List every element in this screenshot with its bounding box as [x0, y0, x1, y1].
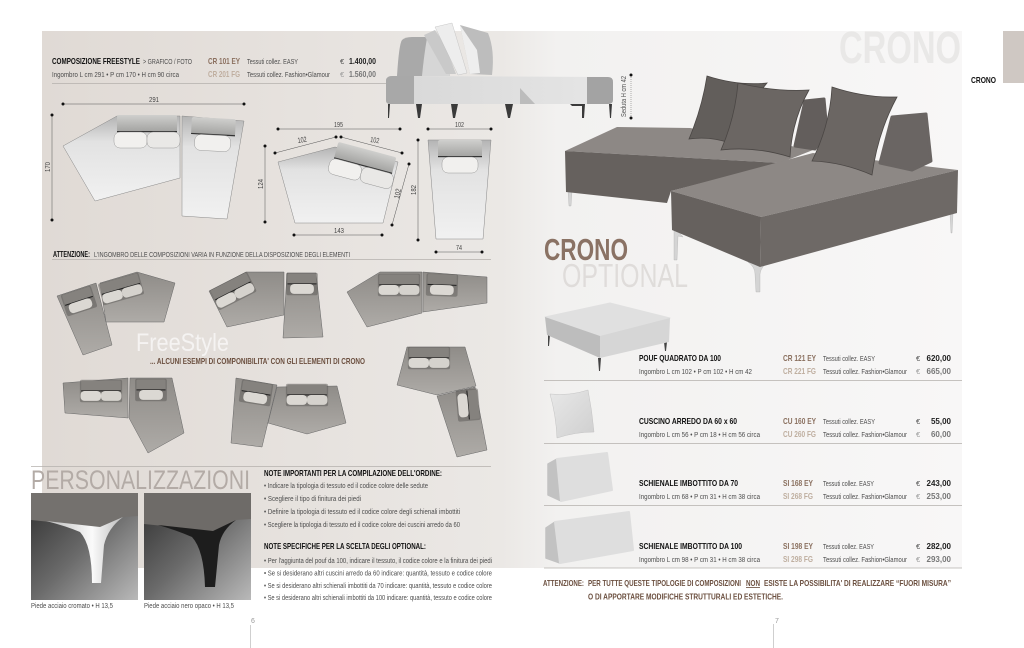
product row: backrest 100: Tessuti collez. EASY — [823, 542, 874, 551]
backrest 70 image — [548, 453, 612, 501]
plan: sofa element — [278, 141, 399, 223]
dimension: seat height: Seduta H cm 42 — [619, 76, 628, 117]
composition header: € — [340, 70, 345, 79]
example layout 1 — [57, 272, 175, 355]
page number 7: 7 — [775, 618, 779, 625]
crono optional heading: OPTIONAL — [562, 257, 688, 294]
optional notes: • Se si desiderano altri schienali imbottiti da 70 indicare: quantità, tessuto e codice colore — [264, 581, 492, 590]
product row: backrest 70: Tessuti collez. EASY — [823, 479, 874, 488]
page number 6 — [250, 618, 255, 648]
product row: pouf: 620,00 — [927, 354, 952, 363]
example layout 2 — [209, 271, 323, 338]
dimension: seat height — [619, 74, 632, 120]
left backrest — [795, 99, 827, 149]
order notes: • Scegliere il tipo di finitura dei piedi — [264, 494, 361, 503]
dimensions: chaise element: 74 — [456, 243, 462, 252]
attention footer: O DI APPORTARE MODIFICHE STRUTTURALI ED ESTETICHE. — [588, 592, 783, 602]
right cushion — [812, 87, 897, 175]
product row: backrest 70: € — [916, 492, 921, 501]
dimensions: freestyle composition: 291 — [149, 95, 159, 104]
product row: backrest 70: Ingombro L cm 68 • P cm 31 • H cm 38 circa — [639, 492, 761, 501]
product row: cushion: 55,00 — [931, 417, 952, 426]
attention note: ATTENZIONE: — [53, 250, 90, 259]
product row: cushion: Tessuti collez. Fashion•Glamour — [823, 430, 907, 439]
dimensions: sofa element — [256, 120, 410, 236]
product row: pouf: € — [916, 367, 921, 376]
attention footer: NON — [746, 579, 760, 588]
dimensions: sofa element: 124 — [256, 179, 265, 189]
product row: backrest 100: 293,00 — [927, 555, 952, 564]
product row: pouf — [544, 303, 962, 380]
dimensions: sofa element: 195 — [334, 120, 343, 129]
back cushion — [689, 76, 767, 143]
front seat left face — [671, 191, 761, 267]
optional notes: • Se si desiderano altri schienali imbottiti da 100 indicare: quantità, tessuto e codice colore — [264, 593, 492, 602]
product row: backrest 100: SI 298 FG — [783, 555, 813, 564]
product row: pouf: Ingombro L cm 102 • P cm 102 • H cm 42 — [639, 367, 752, 376]
product row: cushion: € — [916, 430, 921, 439]
dimensions: sofa element: 102 — [297, 135, 307, 145]
middle cushion — [721, 83, 809, 157]
optional notes — [264, 542, 492, 602]
dimensions: chaise element — [409, 120, 492, 254]
dimensions: chaise element: 182 — [409, 185, 418, 195]
product row: cushion: CU 260 FG — [783, 430, 816, 439]
left seat top — [565, 127, 813, 163]
example layout 3 — [347, 272, 487, 327]
photo: chrome foot — [31, 493, 138, 610]
composition header: COMPOSIZIONE FREESTYLE — [52, 57, 140, 66]
front seat top — [671, 153, 958, 217]
cushion image — [550, 390, 594, 438]
dimensions: freestyle composition — [43, 95, 246, 222]
product row: backrest 70 — [544, 453, 962, 506]
tab: crono: CRONO — [971, 76, 997, 85]
product row: backrest 100: SCHIENALE IMBOTTITO DA 100 — [639, 542, 742, 551]
dimensions: sofa element: 102 — [370, 135, 380, 145]
composition header: € — [340, 57, 345, 66]
product row: backrest 100: € — [916, 555, 921, 564]
order notes — [264, 469, 460, 529]
attention footer: ESISTE LA POSSIBILITA' DI REALIZZARE “FUORI MISURA” — [764, 579, 951, 588]
product row: backrest 100: 282,00 — [927, 542, 952, 551]
attention footer — [543, 579, 951, 602]
page number 7 — [774, 618, 779, 648]
example layout 4 — [63, 378, 184, 453]
photo: black foot: Piede acciaio nero opaco • H 13,5 — [144, 601, 234, 610]
product row: pouf: Tessuti collez. EASY — [823, 354, 875, 363]
composition header: > GRAFICO / FOTO — [143, 57, 192, 66]
side view sofa — [386, 23, 613, 118]
optional notes: NOTE SPECIFICHE PER LA SCELTA DEGLI OPTIONAL: — [264, 542, 426, 551]
backrest 100 image — [546, 512, 633, 563]
product row: backrest 70: 253,00 — [927, 492, 952, 501]
product row: backrest 100: Tessuti collez. Fashion•Glamour — [823, 555, 907, 564]
attention footer: PER TUTTE QUESTE TIPOLOGIE DI COMPOSIZIONI — [588, 579, 741, 588]
sofa legs — [568, 191, 953, 292]
plan: freestyle composition — [63, 115, 244, 219]
product row: cushion — [544, 390, 962, 444]
product row: cushion: Ingombro L cm 56 • P cm 18 • H cm 56 circa — [639, 430, 761, 439]
composition header: 1.560,00 — [349, 70, 376, 79]
product row: cushion: € — [916, 417, 921, 426]
product row: cushion: 60,00 — [931, 430, 952, 439]
product row: backrest 70: 243,00 — [927, 479, 952, 488]
example layout 6 — [397, 347, 487, 457]
order notes: NOTE IMPORTANTI PER LA COMPILAZIONE DELL'ORDINE: — [264, 469, 442, 478]
composition header: Ingombro L cm 291 • P cm 170 • H cm 90 circa — [52, 70, 180, 79]
photo: black foot — [144, 493, 251, 610]
composition header: CR 101 EY — [208, 57, 240, 66]
composition header: Tessuti collez. EASY — [247, 57, 298, 66]
pouf image — [545, 303, 670, 371]
dimensions: sofa element: 143 — [334, 226, 344, 235]
crono optional heading: CRONO — [544, 232, 628, 267]
order notes: • Definire la tipologia di tessuto ed il codice colore degli schienali imbottiti — [264, 507, 460, 516]
example layout 5 — [231, 378, 346, 447]
order notes: • Scegliere la tipologia di tessuto ed il codice colore dei cuscini arredo da 60 — [264, 520, 460, 529]
product row: pouf: 665,00 — [927, 367, 952, 376]
product row: backrest 100: SI 198 EY — [783, 542, 813, 551]
watermark title: CRONO — [839, 22, 961, 73]
photo: chrome foot: Piede acciaio cromato • H 13,5 — [31, 601, 113, 610]
product row: backrest 70: SI 168 EY — [783, 479, 813, 488]
order notes: • Indicare la tipologia di tessuto ed il codice colore delle sedute — [264, 481, 428, 490]
left seat front — [565, 151, 780, 203]
tab: crono — [971, 31, 1024, 85]
product row: pouf: CR 221 FG — [783, 367, 816, 376]
dimensions: chaise element: 102 — [455, 120, 464, 129]
background panel — [42, 31, 962, 568]
composition header — [52, 57, 392, 84]
plan: chaise element — [428, 140, 491, 239]
composition header: Tessuti collez. Fashion•Glamour — [247, 70, 330, 79]
product row: pouf: € — [916, 354, 921, 363]
product row: cushion: Tessuti collez. EASY — [823, 417, 875, 426]
freestyle label: FreeStyle — [136, 329, 229, 357]
dimensions: sofa element: 102 — [392, 188, 403, 199]
product row: backrest 70: Tessuti collez. Fashion•Glamour — [823, 492, 907, 501]
product row: cushion: CU 160 EY — [783, 417, 816, 426]
divider above personalisation — [31, 466, 491, 468]
product row: backrest 100: € — [916, 542, 921, 551]
optional notes: • Per l'aggiunta del pouf da 100, indicare il tessuto, il codice colore e la finitura dei piedi — [264, 556, 492, 565]
product row: cushion: CUSCINO ARREDO DA 60 x 60 — [639, 417, 737, 426]
product row: pouf: Tessuti collez. Fashion•Glamour — [823, 367, 907, 376]
composition header: 1.400,00 — [349, 57, 376, 66]
optional notes: • Se si desiderano altri cuscini arredo da 60 indicare: quantità, tessuto e codice colore — [264, 568, 492, 578]
product row: pouf: POUF QUADRATO DA 100 — [639, 354, 721, 363]
personalizzazioni heading: PERSONALIZZAZIONI — [31, 465, 250, 495]
product row: backrest 70: SI 268 FG — [783, 492, 813, 501]
product row: backrest 70: SCHIENALE IMBOTTITO DA 70 — [639, 479, 738, 488]
page number 6: 6 — [251, 618, 255, 625]
product row: backrest 70: € — [916, 479, 921, 488]
crono optional heading — [544, 232, 688, 294]
composition header: CR 201 FG — [208, 70, 240, 79]
dimensions: freestyle composition: 170 — [43, 162, 52, 172]
product row: pouf: CR 121 EY — [783, 354, 816, 363]
examples caption: ... ALCUNI ESEMPI DI COMPONIBILITA' CON GLI ELEMENTI DI CRONO — [150, 357, 365, 366]
front seat right face — [760, 170, 958, 267]
product row: backrest 100: Ingombro L cm 98 • P cm 31 • H cm 38 circa — [639, 555, 761, 564]
attention note: L'INGOMBRO DELLE COMPOSIZIONI VARIA IN FUNZIONE DELLA DISPOSIZIONE DEGLI ELEMENTI — [94, 250, 350, 259]
attention footer: ATTENZIONE: — [543, 579, 584, 588]
right backrest — [880, 114, 931, 170]
main sofa photo — [565, 76, 958, 292]
product row: backrest 100 — [544, 512, 962, 568]
